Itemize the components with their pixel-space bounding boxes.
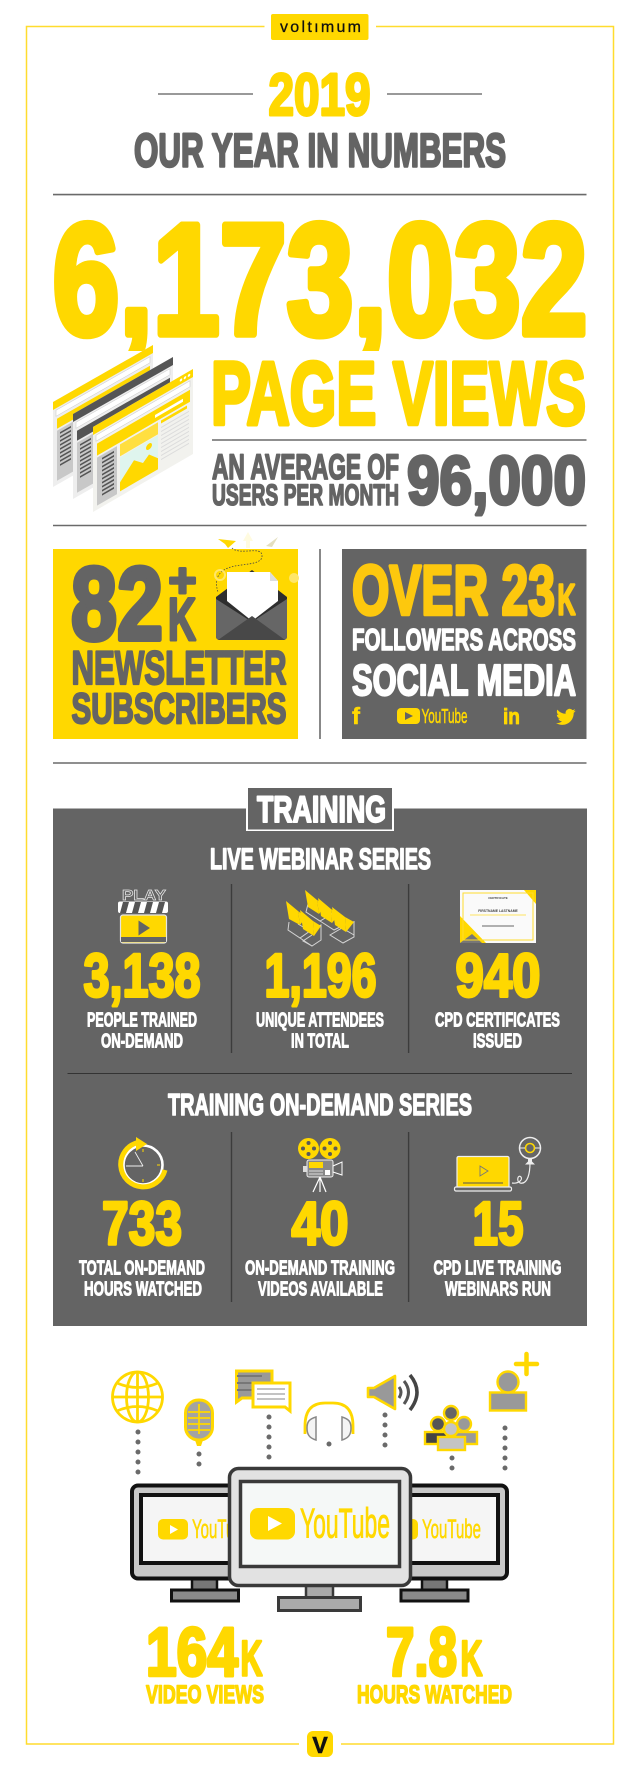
panel: social media followers: K — [558, 576, 576, 624]
stat: on-demand hours watched: HOURS WATCHED — [84, 1278, 202, 1300]
heading: live webinar series: LIVE WEBINAR SERIES — [210, 843, 431, 876]
stat: on-demand hours watched — [79, 1137, 205, 1300]
stat: average users per month: USERS PER MONTH — [212, 479, 399, 512]
stat: people trained on-demand — [84, 887, 200, 1052]
icon: loudspeaker — [368, 1375, 417, 1410]
panel: newsletter subscribers: 82 — [71, 546, 163, 662]
icon: laptop and webcam — [454, 1138, 540, 1191]
icon: microphone — [186, 1400, 212, 1446]
stat: average users per month: 96,000 — [407, 442, 586, 519]
icon: certificate: FIRSTNAME LASTNAME — [478, 909, 519, 913]
monitor: left — [132, 1486, 292, 1601]
stat: people trained on-demand: 3,138 — [84, 942, 200, 1010]
monitor: centre — [230, 1468, 410, 1610]
logo: V badge: V — [312, 1732, 328, 1758]
logo: V badge — [307, 1731, 333, 1758]
monitor: right — [347, 1486, 507, 1601]
stat: video views: K — [240, 1630, 262, 1686]
social icons: in — [503, 704, 520, 729]
social icons: f — [352, 703, 360, 729]
stat: people trained on-demand: ON-DEMAND — [101, 1030, 183, 1052]
social icons: YouTube — [422, 706, 468, 728]
rule above average users — [212, 439, 586, 441]
panel: social media followers — [342, 549, 586, 739]
panel: newsletter subscribers: NEWSLETTER — [72, 641, 286, 694]
icon: certificate: CERTIFICATE — [488, 896, 508, 900]
icon: clock — [121, 1137, 165, 1187]
icon: group of people — [425, 1406, 477, 1450]
stat: unique attendees in total: UNIQUE ATTENDEES — [256, 1008, 384, 1032]
stat: average users per month — [212, 442, 586, 519]
stat: CPD certificates issued: 940 — [456, 942, 540, 1010]
panel: newsletter subscribers: K — [168, 586, 196, 653]
stat: on-demand hours watched: TOTAL ON-DEMAND — [79, 1256, 205, 1280]
title — [134, 62, 506, 176]
stat: hours watched: HOURS WATCHED — [357, 1681, 512, 1709]
stat: on-demand training videos: VIDEOS AVAILABLE — [258, 1278, 383, 1300]
stat: people trained on-demand: PEOPLE TRAINED — [87, 1008, 197, 1032]
stat: CPD live training webinars: CPD LIVE TRAINING — [434, 1256, 562, 1280]
stat: CPD certificates issued: ISSUED — [473, 1030, 522, 1052]
icon: headphones — [305, 1403, 353, 1440]
panel: newsletter subscribers: SUBSCRIBERS — [72, 685, 286, 733]
stat: hours watched: K — [460, 1630, 482, 1686]
panel: training — [53, 786, 587, 1326]
stat: CPD certificates issued: CPD CERTIFICATES — [435, 1008, 560, 1032]
stat: unique attendees in total: IN TOTAL — [291, 1030, 349, 1052]
stat: on-demand training videos: 40 — [292, 1190, 348, 1258]
stat: unique attendees in total — [256, 890, 384, 1052]
icon: browser windows — [53, 345, 193, 512]
icon: certificate — [460, 890, 536, 943]
social icons — [352, 703, 576, 729]
logo: voltimum: voltımum — [280, 19, 361, 36]
stat: average users per month: AN AVERAGE OF — [212, 448, 399, 487]
icon: clapperboard: PLAY — [122, 887, 166, 904]
icon: add person — [490, 1354, 537, 1410]
headline number: page views — [54, 220, 586, 428]
heading: training — [246, 786, 394, 831]
monitor: centre: YouTube — [300, 1500, 390, 1546]
icon: chat bubbles — [236, 1371, 290, 1411]
icon: clapperboard — [118, 887, 168, 943]
stat: CPD live training webinars — [434, 1138, 562, 1300]
stat: CPD live training webinars: WEBINARS RUN — [445, 1278, 551, 1300]
icon: rows of chairs — [286, 890, 354, 946]
stat: video views: VIDEO VIEWS — [146, 1681, 264, 1709]
panel: newsletter subscribers: + — [168, 555, 196, 608]
logo: voltimum — [271, 14, 368, 40]
panel: newsletter subscribers — [53, 546, 298, 739]
stat: unique attendees in total: 1,196 — [264, 942, 376, 1010]
heading: training: TRAINING — [257, 788, 386, 830]
icon: film projector — [298, 1138, 342, 1192]
stat: CPD certificates issued — [435, 890, 560, 1052]
stat: on-demand training videos: ON-DEMAND TRAINING — [245, 1256, 395, 1280]
stat: on-demand hours watched: 733 — [102, 1190, 182, 1258]
stat: hours watched: 7.8 — [386, 1614, 457, 1690]
monitor: right: YouTube — [422, 1514, 481, 1544]
monitor: left: YouTube — [192, 1514, 251, 1544]
icon: envelope with paper plane — [215, 532, 299, 640]
heading: training on-demand series: TRAINING ON-DEMAND SERIES — [168, 1087, 472, 1122]
stat: on-demand training videos — [245, 1138, 395, 1300]
icon: globe — [112, 1372, 162, 1422]
stat: CPD live training webinars: 15 — [472, 1190, 524, 1258]
title: 2019 — [268, 62, 370, 128]
stat: video views: 164 — [146, 1614, 238, 1690]
stat: hours watched — [357, 1614, 512, 1709]
